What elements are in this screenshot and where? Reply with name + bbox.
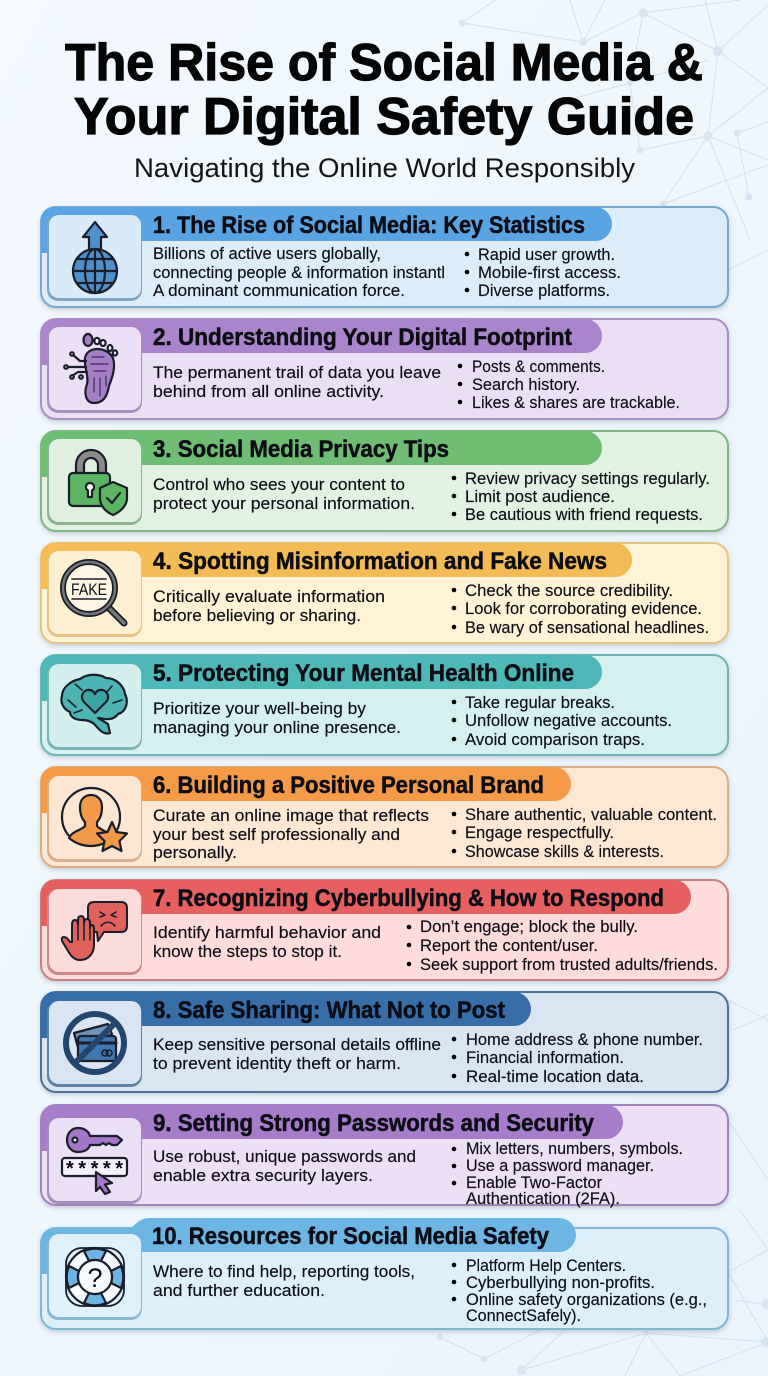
icon: lifebuoy with question mark xyxy=(66,1248,124,1306)
bullet list 1 xyxy=(465,246,621,300)
header tab 8 xyxy=(41,992,531,1038)
heading 4: 4. Spotting Misinformation and Fake News xyxy=(153,548,607,575)
description 1 xyxy=(153,244,445,300)
icon box 10 xyxy=(47,1234,142,1320)
background network pattern xyxy=(436,0,768,1376)
description 7: know the steps to stop it. xyxy=(153,942,342,961)
subtitle: Navigating the Online World Responsibly xyxy=(134,153,636,183)
description 2: The permanent trail of data you leave xyxy=(153,363,441,382)
description 5: managing your online presence. xyxy=(153,718,401,737)
bullet list 8: Real-time location data. xyxy=(466,1068,644,1086)
bullet list 6: Showcase skills & interests. xyxy=(465,843,664,861)
icon: footprint with circuits xyxy=(64,334,117,403)
header tab 7 xyxy=(41,880,691,926)
heading 5: 5. Protecting Your Mental Health Online xyxy=(153,660,574,687)
icon: key and password field: ***** xyxy=(66,1158,123,1180)
title xyxy=(65,34,703,146)
bullet list 9: Mix letters, numbers, symbols. xyxy=(466,1140,683,1158)
panel 6: personal brand xyxy=(41,767,728,867)
description 8 xyxy=(153,1035,441,1073)
bullet list 10 xyxy=(452,1257,707,1325)
icon box 3 xyxy=(47,439,142,525)
bullet list 3: Limit post audience. xyxy=(465,488,615,506)
heading 1: 1. The Rise of Social Media: Key Statistics xyxy=(153,212,585,239)
bullet list 2 xyxy=(458,358,680,412)
heading 10: 10. Resources for Social Media Safety xyxy=(152,1223,550,1250)
icon: brain with heart xyxy=(61,675,127,734)
bullet list 3 xyxy=(452,470,710,524)
icon box 2 xyxy=(47,327,142,413)
icon: globe with arrow xyxy=(73,222,117,293)
bullet list 3: Be cautious with friend requests. xyxy=(465,506,703,524)
bullet list 9: Use a password manager. xyxy=(466,1157,654,1175)
header tab 1 xyxy=(41,207,612,253)
icon: lifebuoy with question mark: ? xyxy=(87,1263,103,1293)
panel 7: cyberbullying xyxy=(41,880,728,980)
icon: key and password field xyxy=(62,1128,127,1194)
bullet list 9 xyxy=(452,1140,683,1208)
heading 8: 8. Safe Sharing: What Not to Post xyxy=(153,997,505,1024)
description 3 xyxy=(153,475,415,513)
description 3: Control who sees your content to xyxy=(153,475,405,494)
bullet list 10: ConnectSafely). xyxy=(466,1307,581,1325)
icon box 4 xyxy=(47,551,142,637)
icon: padlock with shield xyxy=(69,450,127,515)
description 7: Identify harmful behavior and xyxy=(153,923,381,942)
panel 9: passwords xyxy=(41,1105,728,1208)
header tab 6 xyxy=(41,767,571,813)
title: Your Digital Safety Guide xyxy=(74,88,694,146)
bullet list 6: Engage respectfully. xyxy=(465,824,614,842)
description 6: your best self professionally and xyxy=(153,825,400,844)
panel 2: digital footprint xyxy=(41,319,728,419)
description 1: A dominant communication force. xyxy=(153,281,405,300)
bullet list 10: Online safety organizations (e.g., xyxy=(466,1291,707,1309)
panel 1: key statistics xyxy=(41,207,728,307)
description 4 xyxy=(153,587,385,625)
icon box 6 xyxy=(47,776,142,862)
icon: person with star xyxy=(62,788,127,851)
description 5: Prioritize your well-being by xyxy=(153,699,367,718)
description 9: Use robust, unique passwords and xyxy=(153,1147,416,1166)
bullet list 1: Mobile-first access. xyxy=(478,264,621,282)
bullet list 8: Home address & phone number. xyxy=(466,1031,703,1049)
description 7 xyxy=(153,923,381,961)
bullet list 10: Cyberbullying non-profits. xyxy=(466,1274,655,1292)
description 6 xyxy=(153,806,429,862)
description 1: connecting people & information instantl xyxy=(153,263,445,282)
description 2 xyxy=(153,363,441,401)
bullet list 5: Take regular breaks. xyxy=(465,694,615,712)
description 9 xyxy=(153,1147,416,1185)
panel 4: misinformation xyxy=(41,543,728,643)
heading 9: 9. Setting Strong Passwords and Security xyxy=(153,1110,595,1137)
icon box 1 xyxy=(47,215,142,301)
bullet list 5 xyxy=(452,694,672,749)
bullet list 2: Posts & comments. xyxy=(472,358,605,376)
bullet list 1: Diverse platforms. xyxy=(478,282,610,300)
bullet list 2: Likes & shares are trackable. xyxy=(472,394,680,412)
bullet list 3: Review privacy settings regularly. xyxy=(465,470,710,488)
description 8: to prevent identity theft or harm. xyxy=(153,1054,401,1073)
description 2: behind from all online activity. xyxy=(153,382,384,401)
heading 7: 7. Recognizing Cyberbullying & How to Respond xyxy=(153,885,664,912)
header tab 4 xyxy=(41,543,632,589)
panel 10: resources xyxy=(41,1218,728,1329)
bullet list 4: Check the source credibility. xyxy=(465,582,673,600)
title: The Rise of Social Media & xyxy=(65,34,703,92)
icon: prohibited credit cards xyxy=(66,1014,124,1072)
description 4: Critically evaluate information xyxy=(153,587,385,606)
bullet list 7: Don’t engage; block the bully. xyxy=(420,918,638,936)
description 4: before believing or sharing. xyxy=(153,606,361,625)
bullet list 8: Financial information. xyxy=(466,1049,624,1067)
icon: magnifier over FAKE: FAKE xyxy=(71,580,107,599)
panel 5: mental health xyxy=(41,655,728,755)
icon box 5 xyxy=(47,664,142,750)
bullet list 8 xyxy=(452,1031,703,1086)
panel 8: safe sharing xyxy=(41,992,728,1092)
bullet list 5: Unfollow negative accounts. xyxy=(465,712,672,730)
bullet list 10: Platform Help Centers. xyxy=(466,1257,626,1275)
bullet list 2: Search history. xyxy=(472,376,580,394)
header tab 2 xyxy=(41,319,602,365)
panel 3: privacy tips xyxy=(41,431,728,531)
bullet list 9: Authentication (2FA). xyxy=(466,1190,620,1208)
header tab 10 xyxy=(41,1218,576,1274)
heading 2: 2. Understanding Your Digital Footprint xyxy=(153,324,572,351)
bullet list 6 xyxy=(452,806,717,861)
header tab 5 xyxy=(41,655,602,701)
bullet list 6: Share authentic, valuable content. xyxy=(465,806,717,824)
description 6: personally. xyxy=(153,843,237,862)
icon box 9 xyxy=(47,1118,142,1204)
bullet list 4 xyxy=(452,582,709,637)
icon box 8 xyxy=(47,1001,142,1087)
description 5 xyxy=(153,699,401,737)
icon: magnifier over FAKE xyxy=(63,562,124,623)
description 6: Curate an online image that reflects xyxy=(153,806,429,825)
heading 3: 3. Social Media Privacy Tips xyxy=(153,436,449,463)
bullet list 4: Be wary of sensational headlines. xyxy=(465,619,709,637)
heading 6: 6. Building a Positive Personal Brand xyxy=(153,772,544,799)
description 10: Where to find help, reporting tools, xyxy=(153,1262,415,1281)
bullet list 9: Enable Two-Factor xyxy=(466,1174,603,1192)
bullet list 7: Seek support from trusted adults/friends. xyxy=(420,956,718,974)
bullet list 5: Avoid comparison traps. xyxy=(465,731,645,749)
icon: hand and angry speech bubble xyxy=(62,902,127,960)
description 10 xyxy=(153,1262,415,1300)
description 8: Keep sensitive personal details offline xyxy=(153,1035,441,1054)
description 10: and further education. xyxy=(153,1281,325,1300)
bullet list 4: Look for corroborating evidence. xyxy=(465,600,702,618)
bullet list 7 xyxy=(407,918,718,974)
bullet list 7: Report the content/user. xyxy=(420,937,598,955)
description 3: protect your personal information. xyxy=(153,494,415,513)
header tab 9 xyxy=(41,1105,623,1151)
bullet list 1: Rapid user growth. xyxy=(478,246,615,264)
description 1: Billions of active users globally, xyxy=(153,244,381,263)
icon box 7 xyxy=(47,889,142,975)
header tab 3 xyxy=(41,431,602,477)
description 9: enable extra security layers. xyxy=(153,1166,373,1185)
